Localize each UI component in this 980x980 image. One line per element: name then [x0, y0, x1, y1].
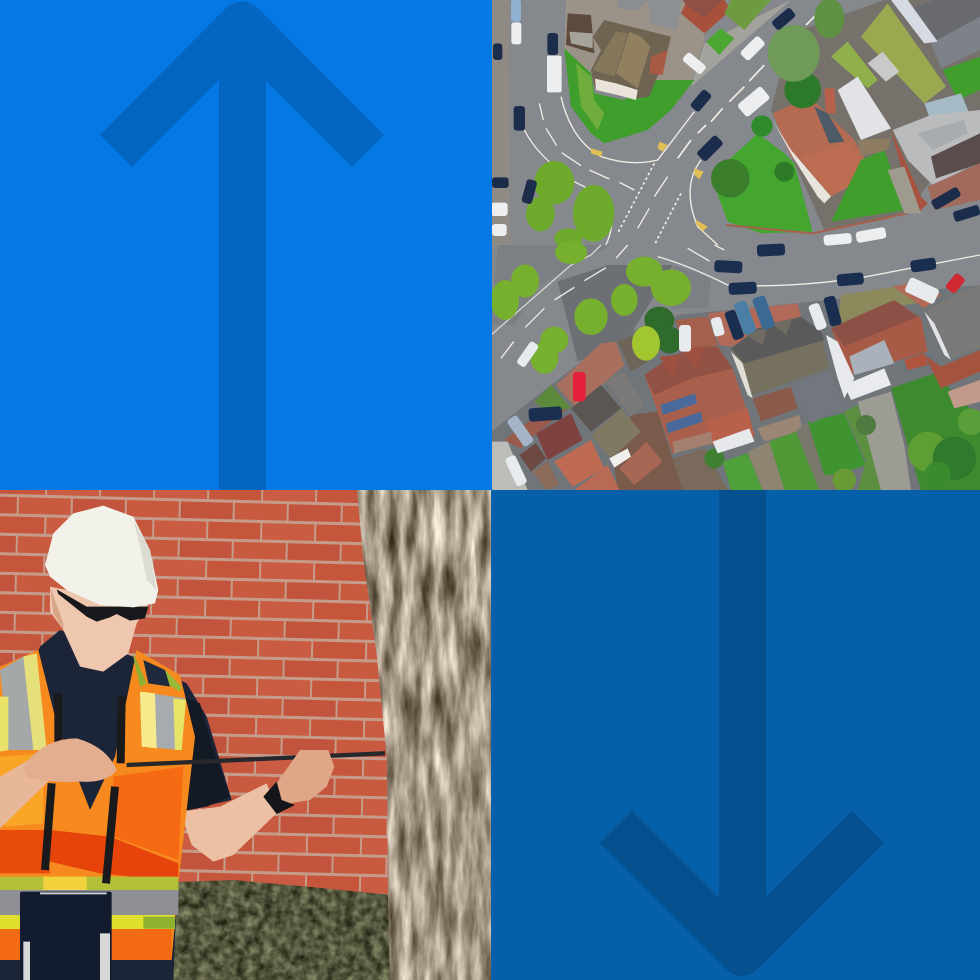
- sunglasses: [57, 589, 148, 622]
- driveways: [556, 342, 624, 408]
- reflective stripes: [0, 656, 34, 750]
- measuring rod: [127, 753, 385, 765]
- upper half of aerial: road junction, gardens and houses: [491, 0, 980, 248]
- lower half of aerial: terraced houses and back gardens: [491, 241, 980, 492]
- panel: worker measuring a tree in front of a brick wall: [0, 490, 492, 980]
- trees: [491, 241, 691, 374]
- hard hat: [45, 506, 158, 607]
- icon: down arrow: [600, 490, 884, 976]
- lower-left houses: [606, 372, 644, 417]
- green verge right: [711, 133, 813, 233]
- instrument box: [20, 892, 112, 980]
- garden plots: [614, 412, 683, 490]
- rear yards, right: [831, 42, 878, 88]
- right hand and watch: [277, 750, 334, 805]
- right slate house: [924, 93, 968, 116]
- grey-roofed house: [731, 317, 829, 395]
- road markings: [524, 15, 816, 245]
- worker: [0, 506, 385, 980]
- white van and shed: [838, 77, 891, 140]
- left arm and hand: [0, 760, 49, 828]
- top red house: [681, 0, 731, 33]
- house with solar panels: [644, 347, 754, 453]
- right forearm: [180, 783, 278, 862]
- green verge with house: [564, 48, 694, 143]
- shirt and sleeve: [0, 630, 232, 980]
- cars: [492, 7, 980, 222]
- panel: top-left blue with up arrow: [0, 0, 492, 490]
- red-brown house with white extension: [831, 300, 928, 375]
- right-hand grey and red house: [924, 285, 980, 358]
- hedge: [173, 880, 390, 980]
- panel: aerial photo of residential streets: [491, 0, 980, 492]
- road markings: [491, 245, 980, 358]
- left parking strip: [491, 0, 510, 245]
- tree trunk: [355, 490, 492, 980]
- hi-vis vest: [0, 650, 195, 960]
- icon: up arrow: [100, 2, 384, 490]
- panel: bottom-right dark blue with down arrow: [491, 490, 980, 980]
- red-roofed house: [772, 103, 864, 196]
- cars: [528, 243, 937, 422]
- lanyard straps: [45, 693, 122, 883]
- trees: [526, 161, 614, 248]
- face: [50, 587, 148, 672]
